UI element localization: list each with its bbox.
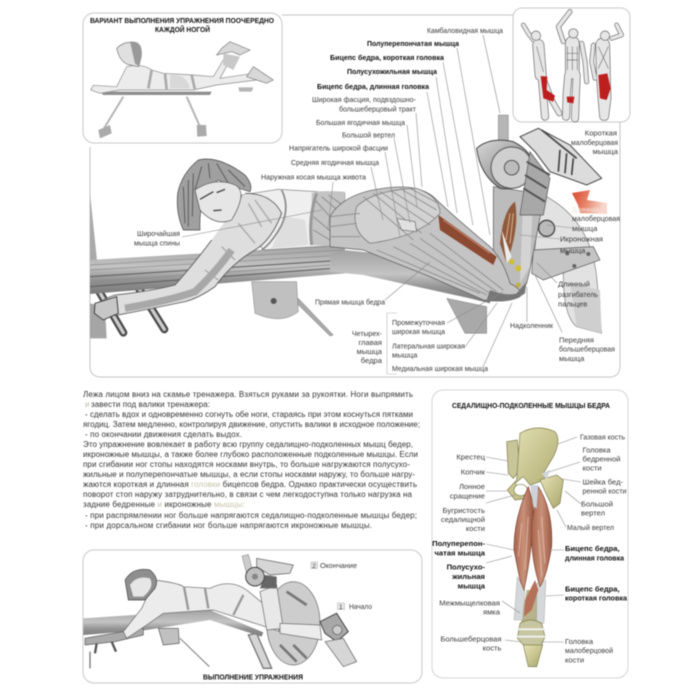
- labels: anatomy callouts: мышца: [458, 582, 486, 590]
- heading: variation title: ВАРИАНТ ВЫПОЛНЕНИЯ УПРАЖНЕНИЯ ПООЧЕРЕДНО: [90, 16, 274, 25]
- labels: anatomy callouts: малоберцовой: [565, 646, 613, 655]
- labels: anatomy callouts on main illustration: Полусухожильная мышца: [347, 67, 438, 76]
- illustration: three anatomical figures: [523, 12, 622, 118]
- labels: anatomy callouts: Полуперепон-: [432, 539, 485, 548]
- text block: exercise instructions: поворот стоп наружу затруднительно, в связи с чем легкодоступна только нагрузка на: [83, 490, 413, 499]
- labels: anatomy callouts: бедренной: [582, 454, 621, 464]
- labels: anatomy callouts: Копчик: [461, 468, 486, 476]
- labels: anatomy callouts: вертел: [581, 508, 605, 518]
- labels: anatomy callouts: сращение: [450, 492, 485, 500]
- labels: anatomy callouts: Большой: [581, 500, 613, 508]
- labels: anatomy callouts on main illustration: Большая ягодичная мышца: [316, 118, 406, 127]
- illustration: woman on flat bench: [91, 42, 273, 138]
- labels: anatomy callouts on main illustration: широкая мышца: [392, 327, 446, 336]
- labels: anatomy callouts: седалищной: [441, 515, 485, 524]
- labels: anatomy callouts on main illustration: Бицепс бедра, короткая головка: [330, 53, 445, 62]
- text block: exercise instructions: завести под валики тренажера:: [91, 400, 210, 409]
- labels: anatomy callouts on main illustration: мышца: [560, 246, 586, 255]
- labels: anatomy callouts: Межмыщелковая: [439, 598, 500, 608]
- labels: anatomy callouts on main illustration: Камбаловидная мышца: [427, 26, 504, 35]
- labels: anatomy callouts on main illustration: Напрягатель широкой фасции: [289, 144, 388, 152]
- panel: one leg at a time variation: [83, 13, 282, 143]
- panel: hamstring anatomy: [432, 390, 628, 678]
- labels: anatomy callouts on main illustration: разгибатель: [558, 290, 598, 299]
- labels: anatomy callouts on main illustration: мышца: [357, 347, 383, 356]
- labels: anatomy callouts: Бицепс бедра,: [565, 584, 620, 594]
- labels: anatomy callouts: Бугристость: [442, 506, 485, 515]
- labels: anatomy callouts: Газовая кость: [580, 432, 625, 442]
- labels: anatomy callouts on main illustration: Широчайшая: [137, 229, 180, 238]
- labels: anatomy callouts: кость: [483, 644, 502, 652]
- labels: anatomy callouts on main illustration: Полуперепончатая мышца: [367, 39, 460, 48]
- labels: anatomy callouts: ямка: [483, 608, 501, 616]
- labels: anatomy callouts on main illustration: Короткая: [585, 128, 617, 138]
- labels: anatomy callouts on main illustration: мышца спины: [134, 238, 180, 248]
- text block: exercise instructions: Лежа лицом вниз на скамье тренажера. Взяться руками за рукоятки. Ноги выпрямить: [83, 390, 413, 399]
- labels: anatomy callouts: Головка: [565, 637, 594, 646]
- heading: anatomy title: СЕДАЛИЩНО-ПОДКОЛЕННЫЕ МЫШЦЫ БЕДРА: [452, 401, 611, 410]
- label: step 2 finish: Окончание: [320, 561, 357, 570]
- illustration: machine roller and foot: [477, 115, 602, 215]
- labels: anatomy callouts: кости: [466, 524, 485, 533]
- illustration: pelvis and thigh back muscles: [507, 428, 563, 667]
- labels: anatomy callouts: чатая мышца: [434, 548, 486, 558]
- heading: variation title: [90, 16, 274, 34]
- panel: exercise execution: [83, 550, 422, 683]
- labels: anatomy callouts on main illustration: Прямая мышца бедра: [315, 298, 386, 306]
- labels: anatomy callouts: ренной кости: [582, 486, 626, 496]
- leader lines: [182, 35, 572, 374]
- labels: anatomy callouts on main illustration: Передняя: [559, 336, 594, 344]
- heading: variation title: КАЖДОЙ НОГОЙ: [155, 25, 210, 34]
- labels: anatomy callouts: длинная головка: [565, 554, 625, 562]
- labels: anatomy callouts: [432, 432, 628, 664]
- labels: anatomy callouts on main illustration: [134, 26, 620, 373]
- text block: exercise instructions: жильные и полуперепончатые мышцы, а если стопы носками наружу, то больше нагру-: [83, 470, 415, 479]
- labels: anatomy callouts on main illustration: Длинный: [558, 280, 590, 288]
- labels: anatomy callouts on main illustration: мышца: [572, 224, 598, 233]
- illustration: woman on leg curl machine, upper body: [90, 159, 345, 338]
- labels: anatomy callouts on main illustration: малоберцовая: [571, 138, 618, 147]
- label: step 1 start: [338, 602, 372, 611]
- illustration: hips, legs and machine: [330, 187, 602, 333]
- labels: anatomy callouts on main illustration: Бицепс бедра, длинная головка: [317, 82, 430, 91]
- labels: anatomy callouts: Шейка бед-: [582, 478, 623, 486]
- labels: anatomy callouts: Головка: [582, 446, 611, 454]
- labels: anatomy callouts on main illustration: мышца: [392, 350, 418, 360]
- labels: anatomy callouts: кости: [565, 656, 584, 664]
- label: step 1 start: Начало: [349, 602, 372, 611]
- labels: anatomy callouts: Бицепс бедра,: [565, 544, 620, 553]
- labels: anatomy callouts: Лонное: [459, 482, 485, 491]
- labels: anatomy callouts on main illustration: Четырех-: [352, 329, 382, 338]
- labels: anatomy callouts on main illustration: Наружная косая мышца живота: [261, 172, 367, 182]
- text block: exercise instructions: - при дорсальном сгибании ног больше напрягаются икроножные мышцы.: [85, 521, 372, 530]
- labels: anatomy callouts on main illustration: малоберцовая: [572, 214, 620, 223]
- labels: anatomy callouts on main illustration: мышца: [593, 147, 619, 156]
- text block: exercise instructions: жаются короткая и длинная головки бицепсов бедра. Однако практически осуществить: [83, 480, 417, 489]
- labels: anatomy callouts: жильная: [451, 572, 485, 581]
- label: step 1 start: 1: [339, 604, 343, 611]
- arrow: direction of movement: [572, 190, 607, 214]
- labels: anatomy callouts on main illustration: бедра: [361, 356, 383, 365]
- leader lines: [486, 437, 581, 642]
- labels: anatomy callouts: Крестец: [456, 452, 486, 462]
- labels: anatomy callouts: Большеберцовая: [440, 634, 502, 644]
- labels: anatomy callouts on main illustration: Длинная: [572, 205, 599, 214]
- label: step 2 finish: 2: [312, 563, 316, 570]
- labels: anatomy callouts on main illustration: Промежуточная: [392, 318, 445, 327]
- labels: anatomy callouts on main illustration: Латеральная широкая: [392, 342, 465, 350]
- labels: anatomy callouts on main illustration: Медиальная широкая мышца: [392, 364, 489, 373]
- text block: exercise instructions: - при распрямлении ног больше напрягаются седалищно-подколенные мышцы бедер;: [85, 511, 417, 520]
- text block: exercise instructions: - по окончании движения сделать выдох.: [85, 430, 242, 439]
- labels: anatomy callouts on main illustration: Большой вертел: [342, 130, 395, 140]
- labels: anatomy callouts on main illustration: Надколенник: [510, 321, 554, 330]
- labels: anatomy callouts: Полусухо-: [447, 562, 485, 572]
- panel: main exercise illustration: [90, 15, 620, 377]
- text block: exercise instructions: [83, 390, 420, 530]
- labels: anatomy callouts on main illustration: главая: [358, 338, 382, 347]
- text block: exercise instructions: Это упражнение вовлекает в работу всю группу седалищно-подколенных мышц бедер,: [83, 440, 413, 449]
- labels: anatomy callouts on main illustration: пальцев: [558, 300, 587, 308]
- labels: anatomy callouts: кости: [582, 464, 602, 472]
- labels: anatomy callouts on main illustration: Средняя ягодичная мышца: [291, 158, 380, 167]
- text block: exercise instructions: задние бедренные и икроножные мышцы:: [83, 500, 245, 509]
- text block: exercise instructions: ягодиц. Затем медленно, контролируя движение, опустить валики в исходное положение;: [83, 420, 420, 429]
- labels: anatomy callouts on main illustration: большеберцовый тракт: [339, 104, 416, 114]
- labels: anatomy callouts: короткая головка: [565, 594, 628, 602]
- heading: execution title: ВЫПОЛНЕНИЕ УПРАЖНЕНИЯ: [203, 672, 303, 682]
- labels: anatomy callouts on main illustration: Широкая фасция, подвздошно-: [312, 95, 416, 104]
- labels: anatomy callouts on main illustration: большеберцовая: [559, 344, 615, 354]
- text block: exercise instructions: - сделать вдох и одновременно согнуть обе ноги, стараясь при этом коснуться пятками: [85, 410, 413, 419]
- labels: anatomy callouts: Малый вертел: [567, 523, 614, 532]
- illustration: woman on machine, start and finish: [83, 554, 357, 668]
- labels: anatomy callouts on main illustration: Икроножная: [560, 234, 603, 244]
- text block: exercise instructions: икроножные мышцы, а также более глубоко расположенные подколенные мышцы. Если: [83, 450, 418, 459]
- labels: anatomy callouts on main illustration: мышца: [559, 354, 585, 363]
- panel: muscles worked: [513, 8, 630, 122]
- text block: exercise instructions: при сгибании ног стопы находятся носками внутрь, то больше нагружаются полусухо-: [83, 460, 410, 469]
- text block: exercise instructions: и: [85, 400, 89, 409]
